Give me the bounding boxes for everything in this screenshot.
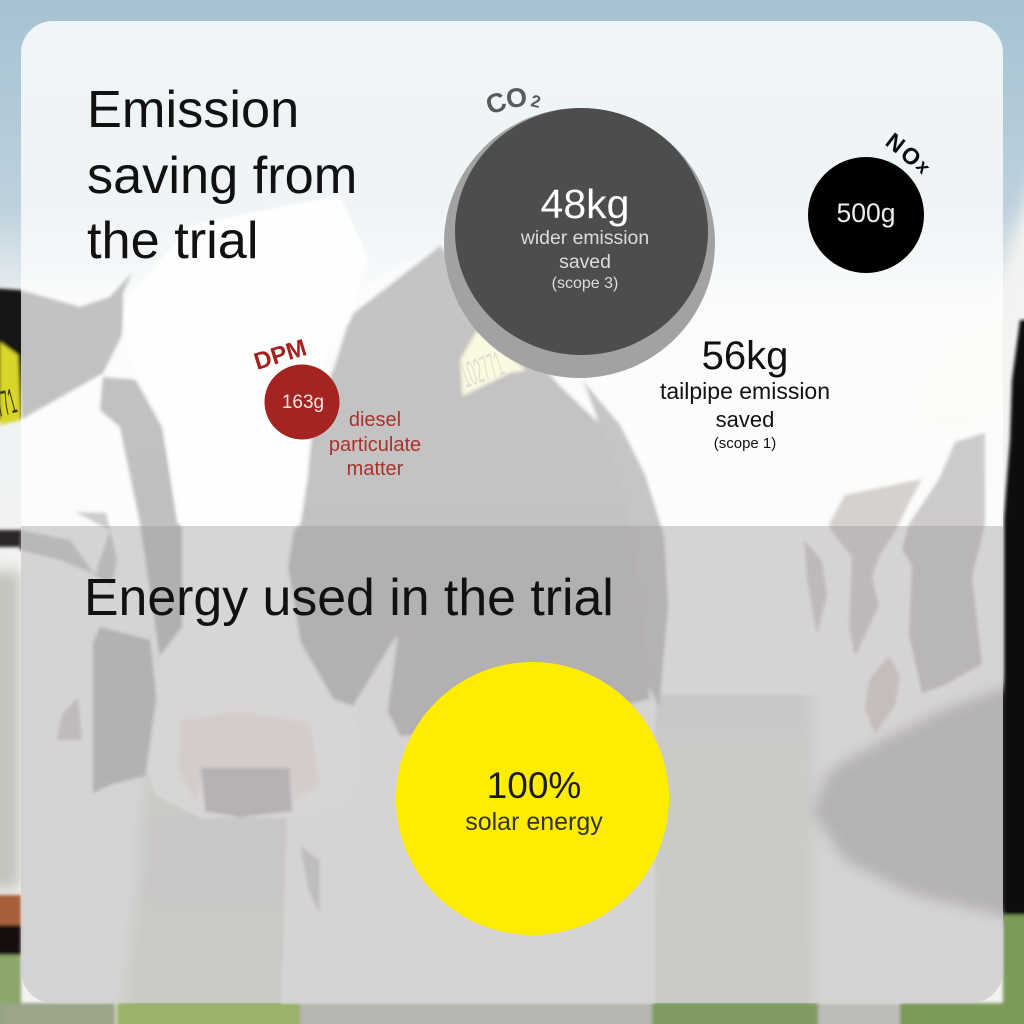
CO2 inner circle: wider emission saved <box>455 108 708 355</box>
left edge details <box>0 530 21 547</box>
snout <box>178 712 320 802</box>
NOx label: N <box>881 127 910 158</box>
tailpipe emission text: 56kg <box>702 334 788 378</box>
diesel particulate matter text: matter <box>347 458 404 480</box>
blurred ear foreground <box>812 675 1024 925</box>
left cow patches <box>20 512 117 585</box>
DPM circle: 163g <box>264 364 340 440</box>
heading: emission saving from the trial <box>87 81 357 270</box>
heading: energy used in the trial: Energy used in the trial <box>84 568 614 626</box>
background photo: cows in a field: 102771 <box>455 343 509 395</box>
NOx label <box>881 127 934 179</box>
panel: energy used backdrop <box>21 526 1003 1003</box>
NOx circle: 500g: 500g <box>837 198 895 228</box>
right cow patches <box>829 479 922 656</box>
heading: emission saving from the trial: Emission <box>87 81 299 139</box>
right edge dark cow <box>1004 320 1024 915</box>
CO2 label: 2 <box>529 91 542 112</box>
CO2 inner circle: wider emission saved: saved <box>559 251 611 273</box>
DPM label: DPM <box>251 334 310 376</box>
tailpipe emission text <box>660 334 830 452</box>
solar energy circle: 100%: solar energy <box>465 808 603 836</box>
tailpipe emission text: saved <box>716 407 774 432</box>
right cow tuft <box>918 320 1003 430</box>
ear tag left <box>0 342 21 425</box>
CO2 label: C <box>482 86 510 121</box>
CO2 outer circle: tailpipe scope 1 <box>444 108 715 378</box>
CO2 inner circle: wider emission saved: 48kg <box>541 181 629 227</box>
cow body white <box>280 245 668 1024</box>
NOx circle: 500g <box>808 157 924 273</box>
solar energy circle: 100% <box>396 662 669 935</box>
tailpipe emission text: (scope 1) <box>714 435 776 452</box>
NOx label: O <box>896 140 926 172</box>
cow head <box>123 195 368 818</box>
NOx label: x <box>911 156 934 179</box>
panel: emission saving backdrop <box>21 21 1003 526</box>
left ear <box>0 273 132 420</box>
cow body dark <box>287 245 650 737</box>
CO2 inner circle: wider emission saved: wider emission <box>520 227 649 249</box>
ear tag center <box>461 332 525 395</box>
CO2 label: O <box>504 82 529 114</box>
CO2 inner circle: wider emission saved: (scope 3) <box>552 275 618 292</box>
diesel particulate matter text <box>329 409 421 480</box>
heading: emission saving from the trial: the trial <box>87 212 258 270</box>
DPM circle: 163g: 163g <box>282 392 324 413</box>
diesel particulate matter text: diesel <box>349 409 401 431</box>
heading: emission saving from the trial: saving from <box>87 147 357 205</box>
bottom strip <box>0 1003 115 1024</box>
tailpipe emission text: tailpipe emission <box>660 378 830 404</box>
diesel particulate matter text: particulate <box>329 434 421 456</box>
solar energy circle: 100%: 100% <box>487 765 581 806</box>
CO2 label <box>482 82 542 121</box>
